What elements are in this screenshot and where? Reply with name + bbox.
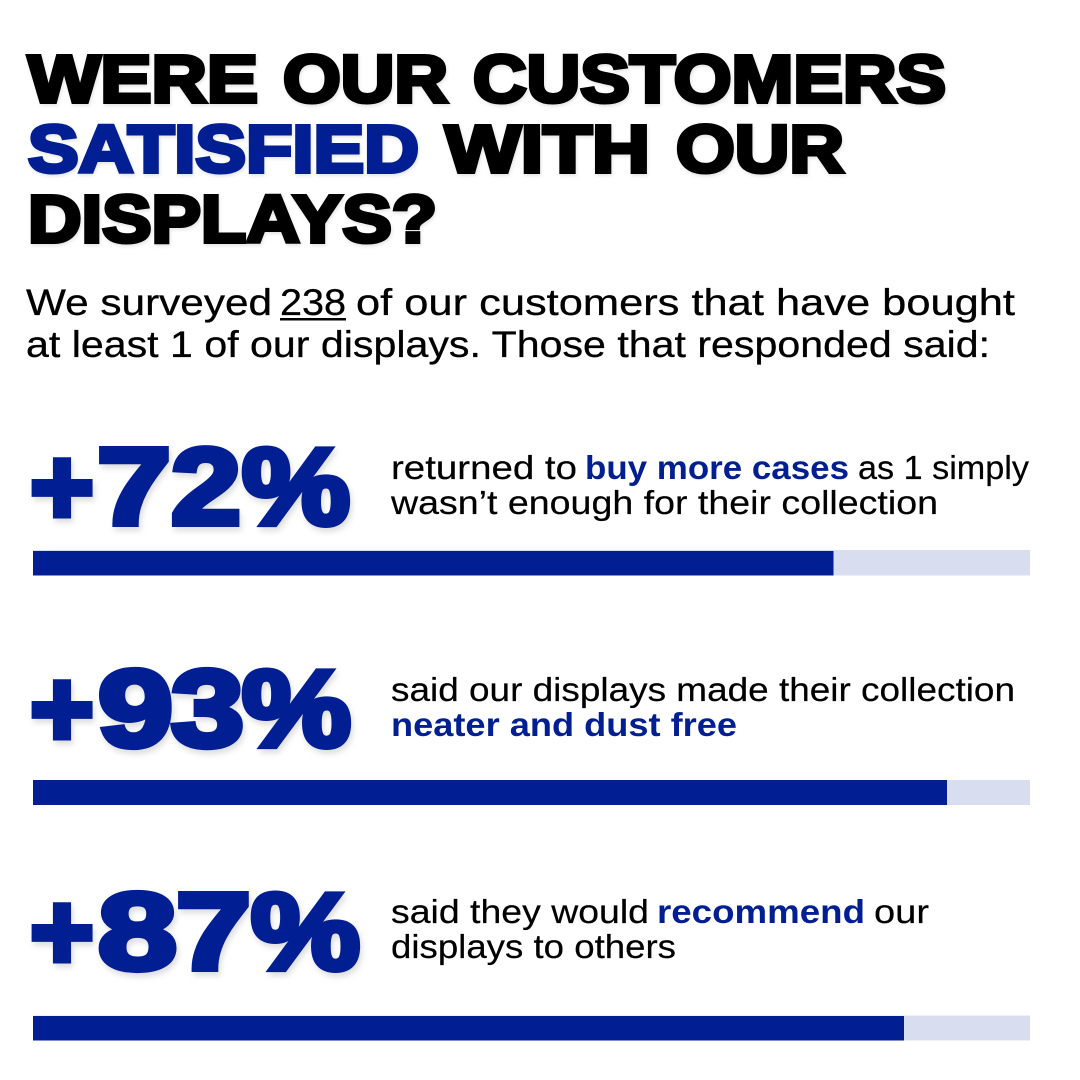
title [28,42,946,257]
big number 72: + [30,426,94,548]
description 72: returned to [391,449,577,486]
description 93 [391,671,1015,743]
survey intro text: 238 [280,282,346,323]
progress bar 93 [33,780,1030,805]
title: CUSTOMERS [473,42,946,117]
big number 87: 7 [176,871,251,993]
title: SATISFIED [28,112,419,187]
description 93: said our displays made their collection [391,671,1015,708]
stat: 72 percent [30,426,1030,576]
big number 87: % [251,871,360,993]
stat: 93 percent [30,648,1030,805]
description 87: our [874,893,929,930]
description 72: buy more cases [585,449,849,486]
description 72: as 1 simply [858,449,1030,486]
big number 93: + [30,648,94,770]
description 72: wasn’t enough for their collection [390,484,938,521]
description 87 [391,893,929,965]
description 87: displays to others [391,928,676,965]
description 93: neater and dust free [391,706,737,743]
stat: 87 percent [30,871,1030,1040]
survey intro text [26,282,1016,365]
title: OUR [283,42,448,117]
survey intro text: at least 1 of our displays. Those that responded said: [26,324,990,365]
title: WITH [445,112,650,187]
description 87: said they would [391,893,649,930]
big number 87: 8 [98,871,177,993]
big number 87 [30,871,360,993]
description 72 [390,449,1030,521]
big number 93: 3 [171,648,244,770]
big number 72 [30,426,350,548]
big number 72: 7 [97,426,171,548]
description 87: recommend [657,893,865,930]
big number 87: + [30,871,94,993]
survey intro text: of our customers that have bought [356,282,1016,323]
big number 93: 9 [98,648,173,770]
title: WERE [28,42,258,117]
big number 72: % [242,426,350,548]
survey intro text: We surveyed [26,282,272,323]
progress bar 87 [33,1016,1030,1040]
big number 72: 2 [171,426,241,548]
big number 93: % [242,648,351,770]
title: OUR [676,112,844,187]
title: DISPLAYS? [28,182,437,257]
progress bar 72 [33,550,1030,576]
big number 93 [30,648,351,770]
